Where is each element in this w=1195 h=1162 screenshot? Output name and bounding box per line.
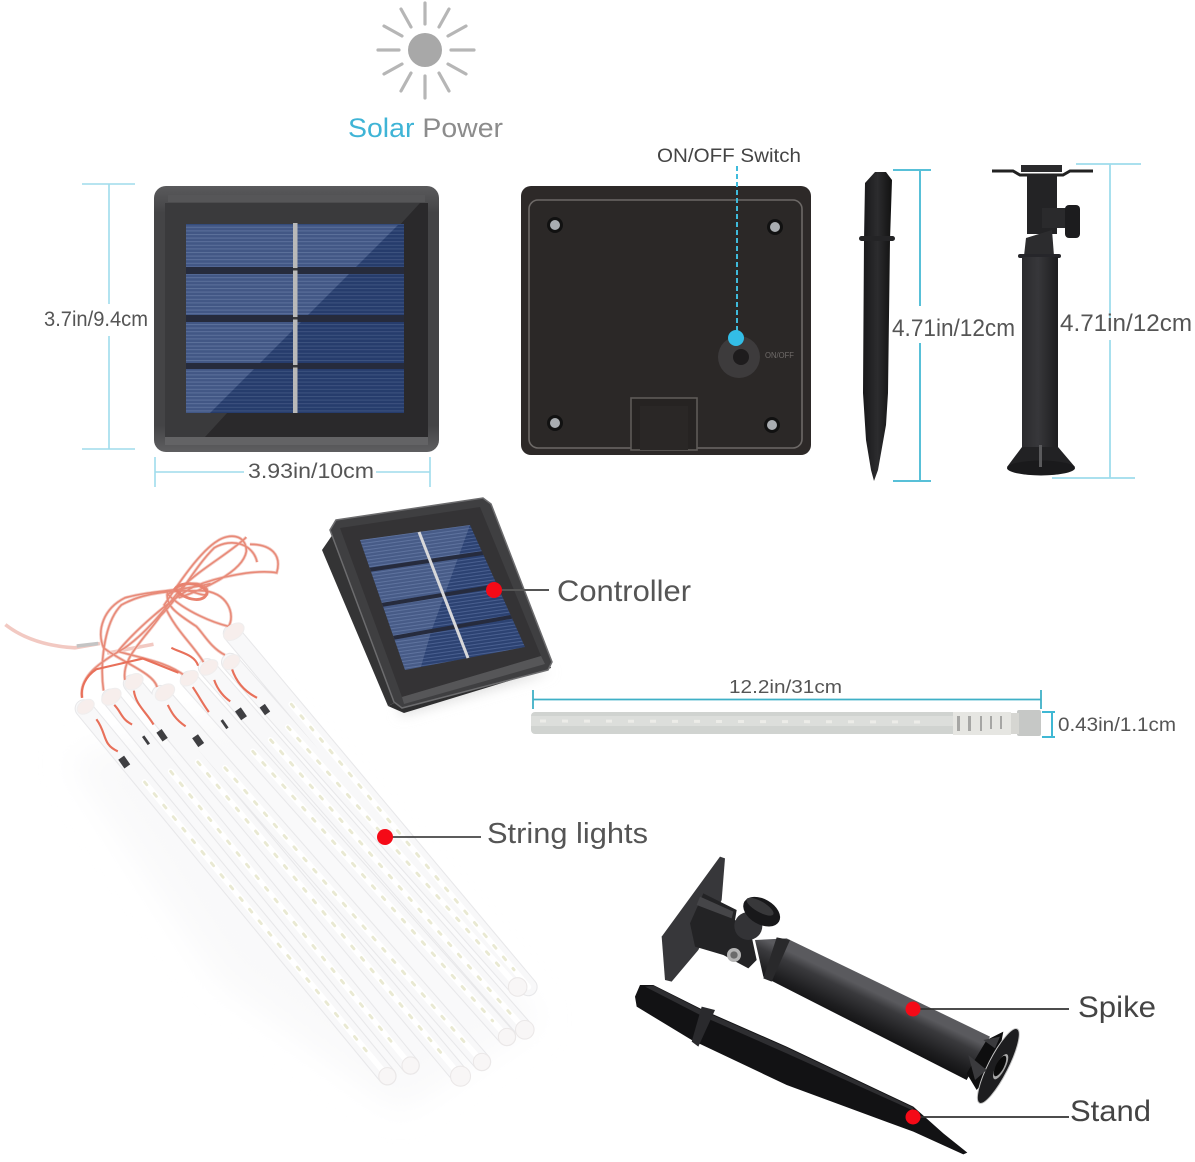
dimension: stand height bbox=[1052, 164, 1192, 478]
dimension: tube length bbox=[533, 677, 1041, 709]
dimension: panel height: 3.7in/9.4cm bbox=[44, 308, 148, 331]
screws bbox=[547, 217, 783, 433]
solar panel back view bbox=[521, 186, 811, 455]
dimension: stand height: 4.71in/12cm bbox=[1060, 310, 1192, 337]
background haze bbox=[70, 700, 540, 1110]
dimension: tube diameter: 0.43in/1.1cm bbox=[1058, 715, 1176, 736]
callout: Spike: Spike bbox=[1078, 991, 1156, 1024]
single tube photo bbox=[531, 710, 1041, 736]
dimension: spike height bbox=[892, 170, 1015, 481]
callout: Stand: Stand bbox=[1070, 1095, 1151, 1128]
callout: String lights bbox=[377, 818, 648, 850]
callout: Stand bbox=[906, 1095, 1151, 1128]
stand and spike photo bbox=[635, 857, 1026, 1154]
stand bbox=[992, 165, 1093, 476]
controller panel photo bbox=[322, 498, 552, 716]
callout: ON/OFF switch: ON/OFF Switch bbox=[657, 146, 801, 167]
callout: Spike bbox=[906, 991, 1156, 1024]
solar panel front view bbox=[154, 186, 439, 452]
callout: Controller: Controller bbox=[557, 575, 691, 608]
icon: sun bbox=[378, 3, 474, 98]
callout: ON/OFF switch bbox=[657, 146, 801, 346]
dimension: panel width bbox=[155, 457, 430, 487]
callout: String lights: String lights bbox=[487, 818, 648, 850]
dimension: panel width: 3.93in/10cm bbox=[248, 460, 374, 483]
tubes bbox=[84, 634, 528, 1076]
dimension: spike height: 4.71in/12cm bbox=[892, 315, 1015, 342]
switch recess bbox=[631, 398, 697, 450]
dimension: panel height bbox=[44, 184, 148, 449]
dimension: tube length: 12.2in/31cm bbox=[729, 677, 842, 697]
heading: Solar Power: Solar Power bbox=[348, 113, 503, 143]
spike photo bbox=[635, 985, 967, 1154]
dimension: tube diameter bbox=[1042, 712, 1176, 737]
callout: Controller bbox=[486, 575, 691, 608]
on/off button: ON/OFF bbox=[765, 351, 794, 360]
ground spike bbox=[859, 172, 895, 481]
stand photo bbox=[662, 857, 1026, 1108]
wires and end caps bbox=[5, 536, 534, 1086]
on/off button bbox=[718, 336, 794, 378]
string lights photo bbox=[5, 536, 540, 1110]
